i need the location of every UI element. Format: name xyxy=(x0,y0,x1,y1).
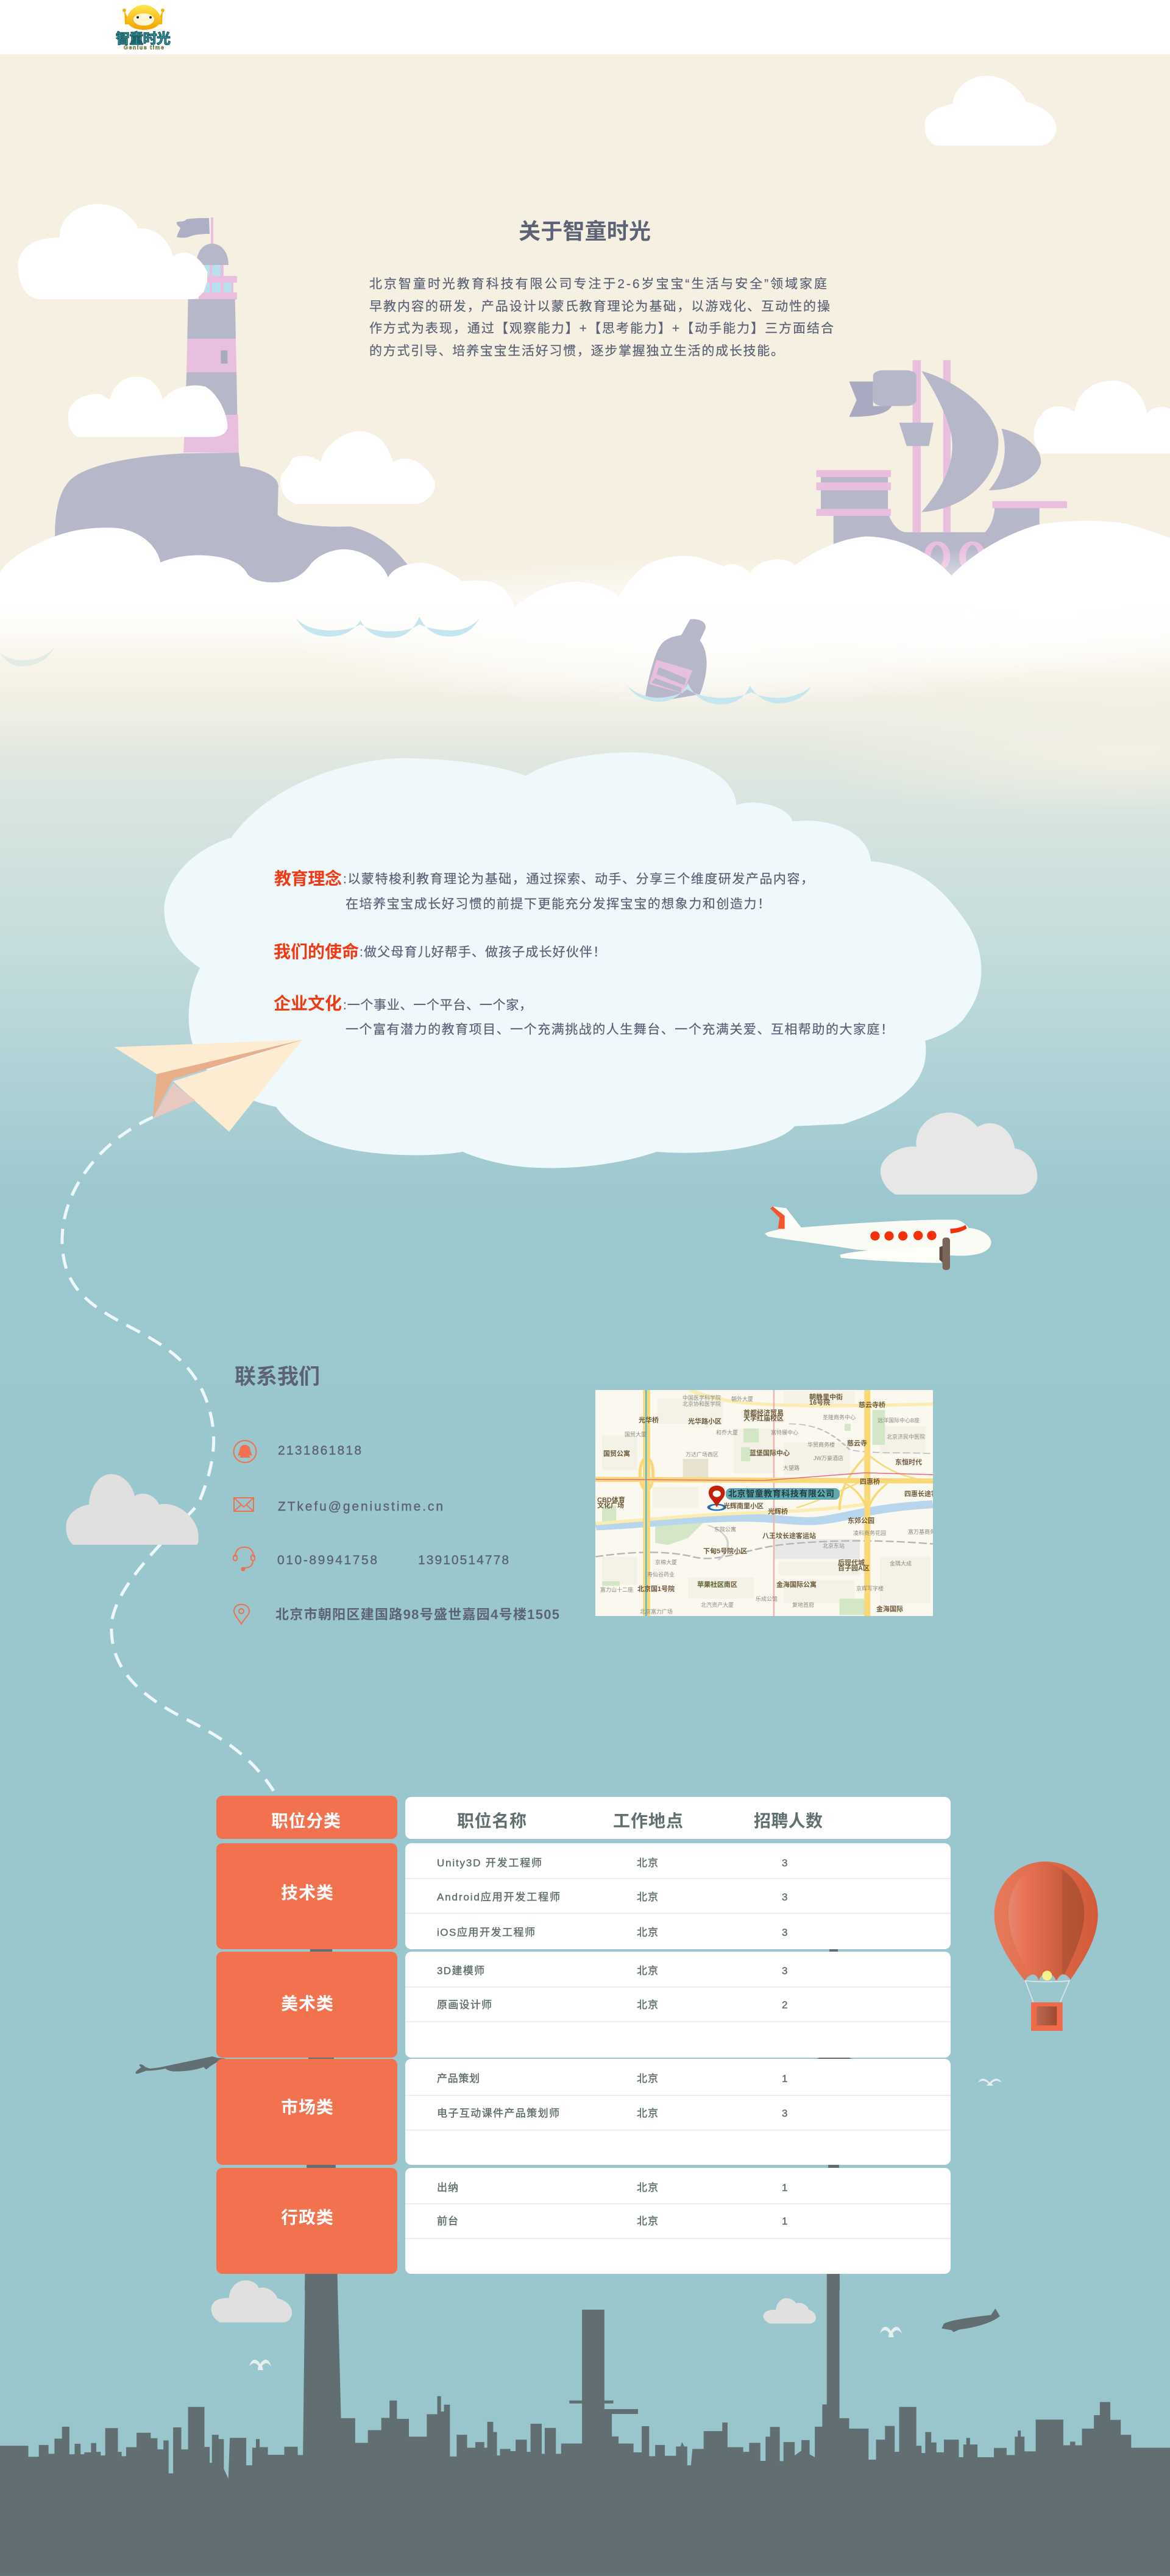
map river xyxy=(595,1505,933,1526)
burner light xyxy=(1042,1971,1052,1980)
skyline xyxy=(0,2274,1170,2576)
map place names: 远洋国际中心B座 xyxy=(878,1417,920,1424)
lighthouse windows xyxy=(204,265,224,277)
map place names: 八王坟长途客运站 xyxy=(762,1531,816,1540)
logo: 智童时光 xyxy=(116,30,171,46)
cloud mid left xyxy=(68,377,227,437)
white clouds xyxy=(18,76,1170,504)
education philosophy: 教育理念 xyxy=(274,869,342,888)
map place names: 北京协和医学院 xyxy=(682,1400,721,1407)
lighthouse flag xyxy=(177,218,210,238)
category: art: 北京 xyxy=(637,1965,658,1977)
map label: 北京智童教育科技有限公司 xyxy=(728,1489,834,1498)
culture xyxy=(274,994,893,1037)
qq number: 2131861818 xyxy=(278,1444,361,1458)
dark plane right xyxy=(941,2309,1000,2332)
category: tech: 3 xyxy=(782,1857,787,1869)
contact heading: 联系我们 xyxy=(235,1365,320,1389)
address: 北京市朝阳区建国路98号盛世嘉园4号楼1505 xyxy=(275,1607,559,1622)
cloud near rock xyxy=(280,431,435,504)
table header: 职位名称 xyxy=(457,1811,526,1830)
category: admin: 北京 xyxy=(637,2182,658,2193)
mission: :做父母育儿好帮手、做孩子成长好伙伴！ xyxy=(360,945,606,959)
category: marketing: 产品策划 xyxy=(437,2073,480,2084)
category: admin: 出纳 xyxy=(437,2182,458,2193)
map place names: 中国医学科学院 xyxy=(682,1394,721,1401)
map place names: CBD体育 xyxy=(597,1495,625,1504)
grey cloud xyxy=(881,1112,1037,1194)
message bottle xyxy=(627,619,811,705)
map main roads xyxy=(595,1390,933,1616)
contact items: 13910514778 xyxy=(418,1553,509,1567)
about paragraph: 早教内容的研发，产品设计以蒙氏教育理论为基础，以游戏化、互动性的操 xyxy=(369,300,830,314)
about paragraph xyxy=(369,277,834,358)
hot air balloon xyxy=(994,1861,1098,2031)
map place names: 国贸公寓 xyxy=(603,1449,630,1458)
table header: 工作地点 xyxy=(613,1812,683,1830)
bird right xyxy=(880,2327,902,2337)
icon: location pin xyxy=(234,1604,249,1624)
header bar xyxy=(0,0,1170,54)
map place names: 东郊公园 xyxy=(848,1516,874,1525)
phone numbers: 010-89941758 xyxy=(277,1553,377,1567)
culture: 企业文化 xyxy=(274,994,342,1013)
panel: values cloud xyxy=(164,752,981,1168)
map place names: 光辉南里小区 xyxy=(723,1501,764,1510)
map place names: 北京富力广场 xyxy=(640,1608,673,1615)
bird near balloon xyxy=(978,2079,1002,2086)
city poles xyxy=(305,1943,852,2290)
category: art: 原画设计师 xyxy=(437,1999,492,2011)
map place names: 大学红庙校区 xyxy=(743,1414,784,1422)
map place names: 凌科商务花园 xyxy=(853,1530,886,1536)
category: tech: 北京 xyxy=(637,1857,658,1869)
email address: ZTkefu@geniustime.cn xyxy=(278,1500,443,1514)
map place names: 北京国1号院 xyxy=(637,1584,675,1593)
map place names: 北汽资产大厦 xyxy=(701,1601,734,1608)
contact items xyxy=(233,1441,559,1624)
bottle label xyxy=(649,660,692,693)
paper plane xyxy=(114,1040,302,1132)
waves xyxy=(0,616,480,666)
map place names: 光辉桥 xyxy=(768,1507,788,1516)
wave 2 xyxy=(627,683,811,705)
icon: qq xyxy=(234,1441,256,1463)
basket xyxy=(1031,2002,1063,2031)
balloon ropes xyxy=(1025,1981,1070,2002)
table header: 职位分类 xyxy=(271,1811,341,1830)
map place names: 下甸5号院小区 xyxy=(703,1547,747,1555)
map place names: 北京济民中医院 xyxy=(887,1433,925,1440)
map place names xyxy=(597,1392,951,1615)
category: admin: 前台 xyxy=(437,2215,458,2227)
category: tech: 北京 xyxy=(637,1927,658,1938)
map place names: 慈云寺 xyxy=(847,1439,867,1447)
crow's nest xyxy=(899,423,934,446)
category: tech: 北京 xyxy=(637,1891,658,1903)
map place names: 华贸商务楼 xyxy=(807,1441,835,1448)
cloud top right xyxy=(925,76,1057,146)
map place names: 和乔大厦 xyxy=(716,1429,738,1436)
logo: Genius time xyxy=(124,44,164,51)
wave 1 xyxy=(296,616,480,638)
map xyxy=(595,1390,951,1616)
map place names: 金隅大成 xyxy=(890,1560,912,1567)
table header: 招聘人数 xyxy=(754,1812,823,1830)
cloud bottom right xyxy=(763,2298,816,2324)
ship hull xyxy=(834,507,1040,595)
map place names: 京辉写字楼 xyxy=(856,1585,884,1592)
map place names: 大望路 xyxy=(783,1464,800,1471)
about heading: 关于智童时光 xyxy=(519,219,651,244)
mission: 我们的使命 xyxy=(274,942,359,961)
ship masts xyxy=(913,360,921,532)
category: marketing xyxy=(216,2059,951,2165)
balloon centre panel xyxy=(1009,1862,1084,1981)
map place names: 后现代城 xyxy=(838,1558,865,1567)
map place names: 金海国际 xyxy=(876,1604,903,1613)
map place names: 四惠长途客运站 xyxy=(904,1489,951,1498)
about paragraph: 的方式引导、培养宝宝生活好习惯，逐步掌握独立生活的成长技能。 xyxy=(369,344,784,358)
category: tech: 3 xyxy=(782,1891,787,1903)
ship xyxy=(817,360,1067,595)
map place names: 富力山十二座 xyxy=(600,1586,633,1593)
dashed flight path xyxy=(62,1117,274,1791)
education philosophy: 在培养宝宝成长好习惯的前提下更能充分发挥宝宝的想象力和创造力！ xyxy=(346,897,770,911)
bird left xyxy=(249,2360,271,2370)
birds xyxy=(249,2079,1002,2370)
category: art: 2 xyxy=(782,1999,787,2011)
category: tech: iOS应用开发工程师 xyxy=(437,1927,535,1938)
airplane windows xyxy=(870,1231,880,1241)
map pin xyxy=(709,1486,725,1510)
category: tech: 3 xyxy=(782,1927,787,1938)
category: art: 3 xyxy=(782,1965,787,1977)
ship rings xyxy=(927,543,947,570)
table header xyxy=(216,1796,951,1839)
logo xyxy=(116,5,171,51)
mission xyxy=(274,942,606,961)
map place names: 苹果社区南区 xyxy=(697,1580,737,1589)
about paragraph: 北京智童时光教育科技有限公司专注于2-6岁宝宝“生活与安全”领域家庭 xyxy=(369,277,827,291)
map place names: 富特展中心 xyxy=(771,1429,798,1436)
map place names: 寿仙谷药业 xyxy=(647,1571,675,1578)
wave left xyxy=(0,647,54,666)
airplane xyxy=(765,1207,991,1270)
map place names: 北京东站 xyxy=(823,1542,845,1549)
category: marketing: 北京 xyxy=(637,2073,658,2084)
category: admin: 1 xyxy=(782,2182,787,2193)
map secondary roads xyxy=(595,1390,933,1523)
map place names: 蓝堡国际中心 xyxy=(750,1449,790,1457)
map place names: 文化广场 xyxy=(597,1501,624,1509)
map blocks xyxy=(602,1391,931,1603)
lighthouse xyxy=(55,217,412,595)
map place names: JW万豪酒店 xyxy=(814,1455,843,1461)
map place names: 16号院 xyxy=(809,1398,830,1406)
lighthouse tower xyxy=(183,299,239,453)
culture: :一个事业、一个平台、一个家， xyxy=(343,998,532,1012)
map place names: 乐成公馆 xyxy=(756,1595,778,1602)
rock island xyxy=(55,453,412,595)
category: tech xyxy=(216,1843,951,1949)
map place names: 复地首府 xyxy=(792,1601,814,1608)
map place names: 光华路小区 xyxy=(688,1417,722,1425)
icon: headset xyxy=(233,1547,255,1570)
category: art: 3D建模师 xyxy=(437,1965,484,1977)
culture: 一个富有潜力的教育项目、一个充满挑战的人生舞台、一个充满关爱、互相帮助的大家庭！ xyxy=(346,1023,893,1037)
category: art: 北京 xyxy=(637,1999,658,2011)
category: tech: Unity3D 开发工程师 xyxy=(437,1857,542,1869)
category: marketing: 市场类 xyxy=(281,2098,333,2117)
cloud bottom left xyxy=(211,2281,292,2323)
map place names: 四惠桥 xyxy=(860,1477,880,1486)
propeller xyxy=(940,1246,943,1263)
icon: email xyxy=(234,1498,254,1511)
category: admin: 北京 xyxy=(637,2215,658,2227)
cloud left xyxy=(18,204,207,299)
map place names: 富万基商务 xyxy=(908,1528,935,1535)
dark plane left xyxy=(136,2056,225,2073)
map place names: 圣隆商务中心 xyxy=(823,1414,856,1420)
map place names: 金海国际公寓 xyxy=(776,1580,817,1589)
map place names: 百子园A区 xyxy=(838,1564,870,1572)
map place names: 光华桥 xyxy=(639,1416,659,1424)
map place names: 朝静里中街 xyxy=(809,1392,843,1401)
ship cabin xyxy=(821,476,888,515)
map place names: 东院公寓 xyxy=(714,1526,736,1533)
category: admin xyxy=(216,2168,951,2274)
category: tech: Android应用开发工程师 xyxy=(437,1891,560,1903)
education philosophy: :以蒙特梭利教育理论为基础，通过探索、动手、分享三个维度研发产品内容， xyxy=(343,872,814,886)
map place names: 首都经济贸易 xyxy=(743,1408,784,1417)
ship sails xyxy=(921,371,998,512)
about paragraph: 作方式为表现，通过【观察能力】+【思考能力】+【动手能力】三方面结合 xyxy=(369,322,834,336)
category: admin: 1 xyxy=(782,2215,787,2227)
map place names: 万达广场西区 xyxy=(686,1451,718,1458)
education philosophy xyxy=(274,869,814,911)
map place names: 慈云寺桥 xyxy=(859,1400,885,1409)
ship flag xyxy=(849,381,892,417)
table xyxy=(216,1796,951,2274)
map place names: 国贸大厦 xyxy=(625,1431,647,1438)
category: marketing: 北京 xyxy=(637,2108,658,2119)
map parks xyxy=(602,1410,885,1615)
map place names: 东恒时代 xyxy=(895,1458,922,1466)
bottom clouds xyxy=(211,2281,816,2324)
grey cloud left xyxy=(66,1474,199,1545)
category: marketing: 3 xyxy=(782,2108,787,2119)
map place names: 京棉大厦 xyxy=(655,1559,677,1565)
cloud right xyxy=(1034,381,1170,453)
fog cloud band xyxy=(0,521,1170,819)
category: admin: 行政类 xyxy=(281,2208,333,2227)
category: marketing: 电子互动课件产品策划师 xyxy=(437,2108,559,2119)
map place names: 朝外大厦 xyxy=(731,1396,753,1402)
category: art: 美术类 xyxy=(281,1994,333,2013)
category: art xyxy=(216,1952,951,2058)
category: marketing: 1 xyxy=(782,2073,787,2084)
category: tech: 技术类 xyxy=(281,1883,333,1902)
